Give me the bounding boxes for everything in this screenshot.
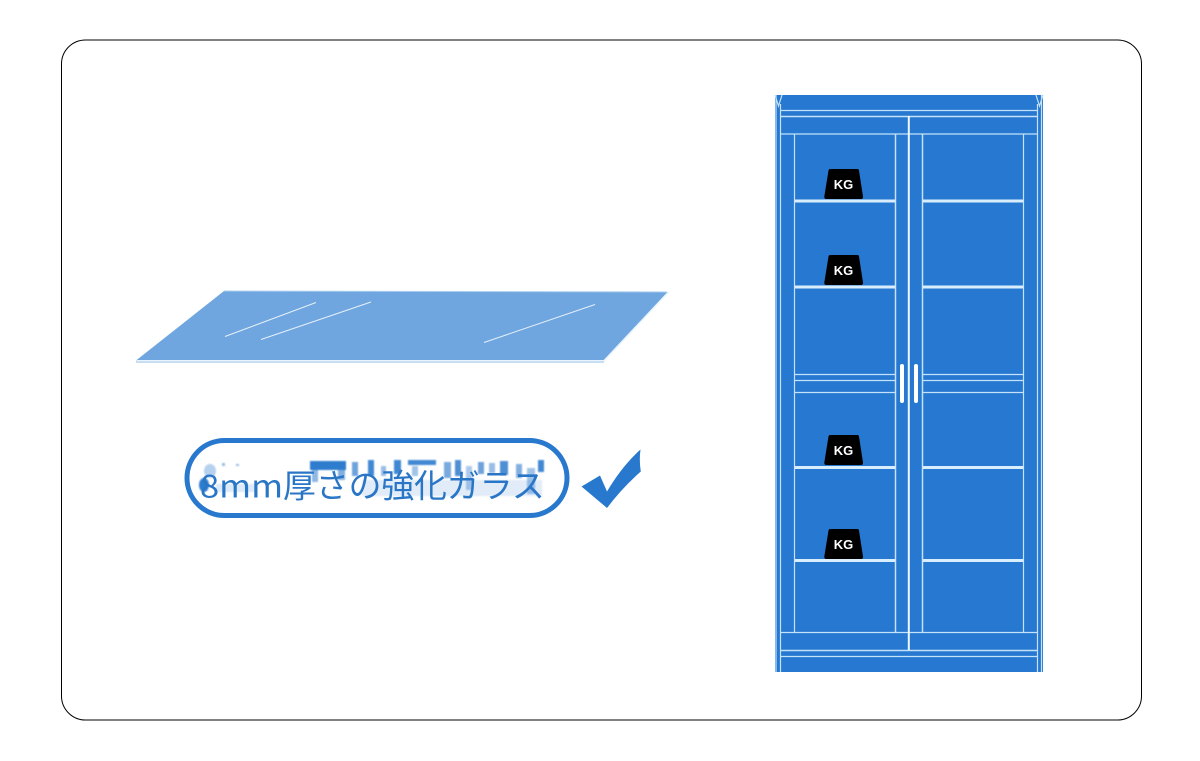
label pill: 8mm tempered glass: [187, 440, 567, 516]
icon: KG weight 2: KG: [834, 263, 853, 278]
mid rails: [795, 374, 1023, 392]
icon: KG weight 2: [824, 255, 863, 285]
shelves: [795, 200, 1023, 562]
icon: KG weight 1: [824, 169, 863, 199]
icon: glass panel: [136, 291, 669, 362]
icon: KG weight 1: KG: [834, 177, 853, 192]
icon: KG weight 3: [824, 435, 863, 465]
label text: tempered glass: 厚さの強化ガラス: [283, 460, 545, 508]
icon: KG weight 3: KG: [834, 443, 853, 458]
wardrobe: [775, 95, 1043, 672]
door handles: [900, 364, 918, 403]
icon: KG weight 4: [824, 529, 863, 559]
label text: thickness: 8mm: [200, 462, 283, 506]
icon: KG weight 4: KG: [834, 537, 853, 552]
blurred ghost text artefacts: [199, 460, 544, 496]
icon: check mark: [582, 450, 641, 508]
